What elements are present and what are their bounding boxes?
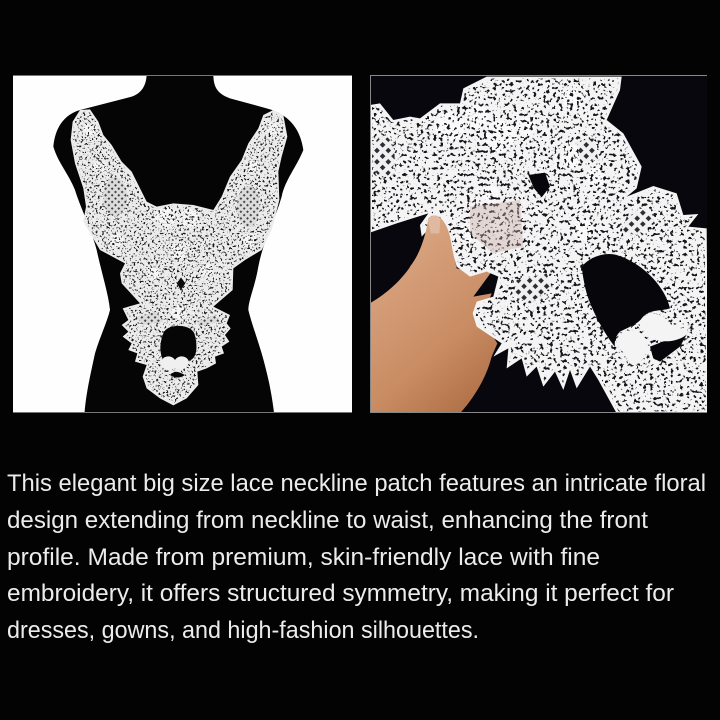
description text block: dresses, gowns, and high-fashion silhouettes. (7, 617, 479, 644)
lace piece (370, 77, 708, 413)
thumb over lace (410, 216, 454, 268)
hand (370, 216, 497, 413)
description text block: embroidery, it offers structured symmetry, making it perfect for (7, 580, 674, 607)
flower motifs (435, 90, 606, 242)
mesh areas (513, 273, 552, 303)
thumbnail (428, 215, 440, 233)
description text block (7, 470, 706, 644)
mesh areas (103, 177, 127, 216)
pink-tinted mesh near fingers (470, 200, 523, 253)
panel: hand holding lace photo (370, 75, 708, 413)
description text block: profile. Made from premium, skin-friendly lace with fine (7, 544, 600, 571)
flower motifs (84, 122, 278, 319)
small openings (528, 173, 550, 197)
centre opening and heart motif (160, 326, 196, 377)
description text block: design extending from neckline to waist, enhancing the front (7, 507, 648, 534)
panel edge lines (370, 75, 707, 413)
diamond opening (177, 277, 185, 290)
large crescent opening (582, 254, 670, 347)
panel edge lines (13, 76, 352, 412)
panel: mannequin photo (13, 73, 352, 415)
description text block: This elegant big size lace neckline patch features an intricate floral (7, 470, 706, 497)
mannequin silhouette (53, 73, 303, 415)
scroll motifs (617, 330, 647, 365)
lace neckline patch (71, 109, 287, 405)
